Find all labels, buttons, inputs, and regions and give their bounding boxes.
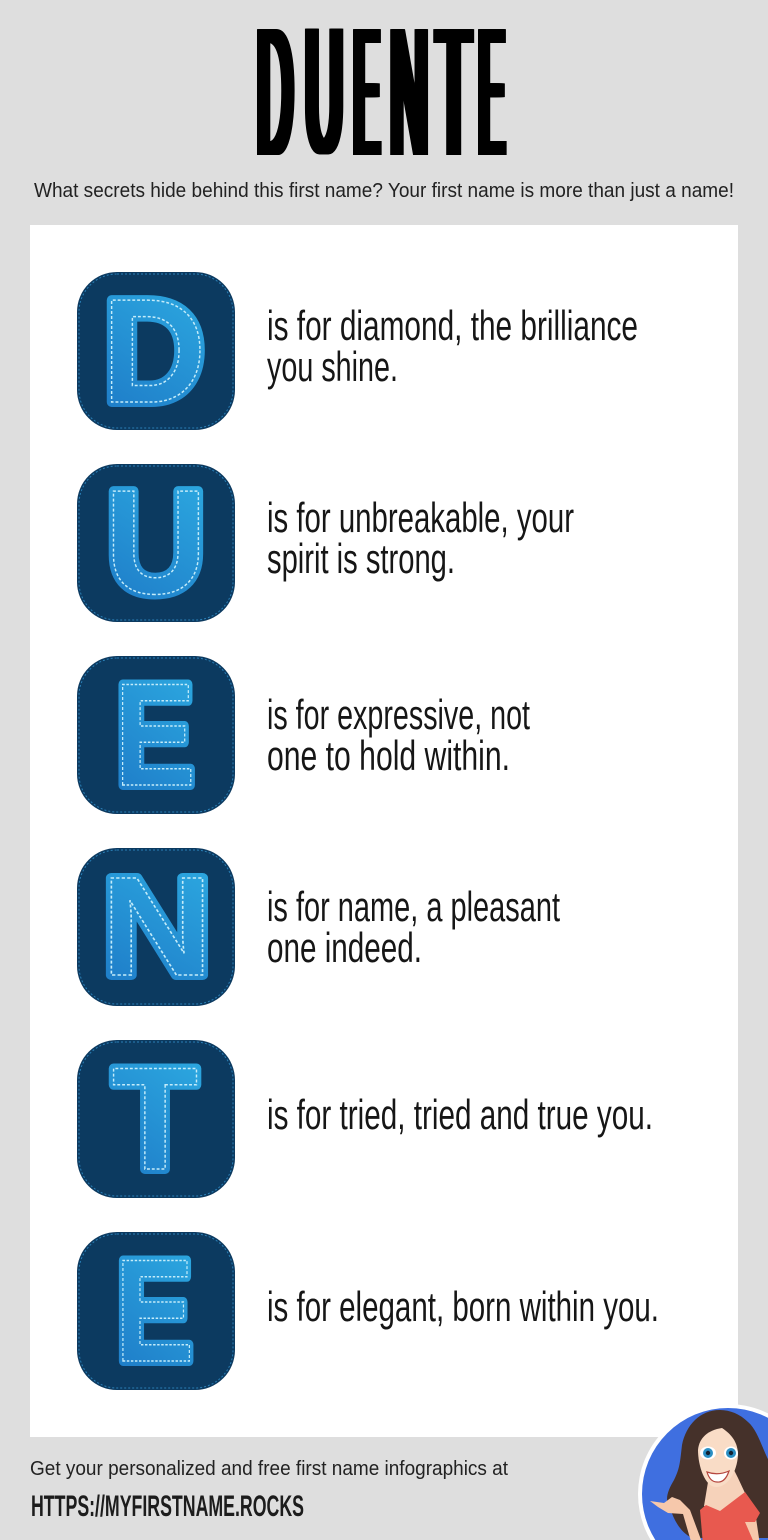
text: N meaning: is for name, a pleasant [267,883,560,930]
row: N [77,847,560,1006]
text: N meaning: one indeed. [267,924,422,971]
icon: letter U: U [105,460,207,625]
icon: letter E: E [114,653,196,816]
icon: letter T [77,1037,235,1200]
right arm [745,1520,760,1540]
text: D meaning: you shine. [267,343,398,390]
text: E meaning [267,691,530,779]
row: D [77,269,638,434]
title [253,0,507,194]
row: E [77,653,530,816]
arm and hand [650,1497,703,1540]
icon: letter E [77,653,235,816]
smile [707,1471,729,1482]
icon: letter U [77,460,235,625]
icon: letter T: T [112,1037,198,1200]
text: U meaning [267,494,574,582]
hair [667,1410,768,1538]
text: E meaning: one to hold within. [267,732,510,779]
avatar: woman in circle [638,1404,768,1540]
icon: letter U: U [105,460,207,625]
text: E meaning: is for expressive, not [267,691,530,738]
row: U [77,460,574,625]
icon: letter N: N [101,847,213,1005]
icon: letter D [77,269,235,434]
panel: letter meanings [30,225,738,1437]
text: D meaning [267,302,638,390]
icon: letter E [77,1229,235,1392]
neck and chest [704,1470,745,1512]
subtitle: What secrets hide behind this first name? Your first name is more than just a name! [34,180,734,202]
text: N meaning [267,883,560,971]
shirt [700,1492,760,1540]
row: E [77,1229,659,1392]
icon: letter E: E [115,1229,194,1392]
text: U meaning: is for unbreakable, your [267,494,574,541]
icon: letter D: D [102,269,206,434]
icon: letter N [77,847,235,1006]
row: T [77,1037,653,1200]
icon: letter N: N [101,847,213,1005]
footer url: HTTPS://MYFIRSTNAME.ROCKS [31,1490,304,1523]
icon: letter D: D [102,269,206,434]
icon: letter E: E [115,1229,194,1392]
face [698,1428,738,1487]
eyes [700,1446,738,1460]
icon: letter T: T [112,1037,198,1200]
text: U meaning: spirit is strong. [267,535,455,582]
footer text: Get your personalized and free first name infographics at [30,1458,508,1480]
icon: letter E: E [114,653,196,816]
